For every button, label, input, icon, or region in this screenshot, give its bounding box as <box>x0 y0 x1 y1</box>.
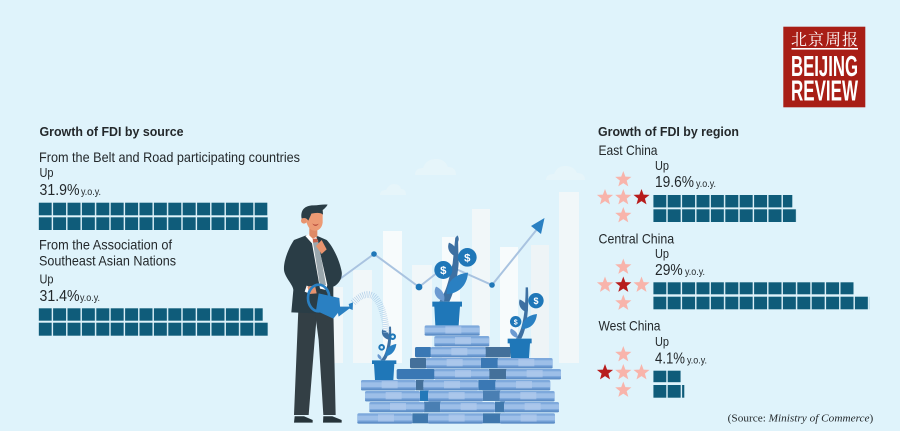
bar: 19.6 percent <box>653 195 797 222</box>
block: West China <box>597 318 707 398</box>
block: Belt and Road: From the Belt and Road participating countries <box>39 149 300 165</box>
block: West China: Up <box>655 335 669 349</box>
block: Belt and Road: 31.9% <box>40 182 80 199</box>
block: Central China: 29% <box>655 262 683 279</box>
block: West China: 4.1% <box>655 350 685 367</box>
block: Central China: Central China <box>598 230 674 246</box>
logo: Beijing Review <box>783 27 865 108</box>
block: ASEAN: From the Association of <box>39 236 172 252</box>
block: ASEAN: Southeast Asian Nations <box>39 252 176 268</box>
bar: 4.1 percent <box>653 371 684 398</box>
plant: large centre: $ <box>464 252 471 264</box>
icon: stars, east highlighted <box>597 171 650 222</box>
head <box>301 204 328 239</box>
source note: (Source: Ministry of Commerce) <box>728 413 874 425</box>
block: East China: 19.6% <box>655 174 694 191</box>
bar: 29 percent <box>653 282 869 309</box>
lower hand <box>307 285 317 294</box>
block: Central China: y.o.y. <box>685 267 705 278</box>
illustration: potted money plants <box>372 235 544 380</box>
block: Central China: Up <box>655 247 669 261</box>
block: Central China <box>597 230 869 310</box>
icon: stars, centre highlighted <box>597 258 650 310</box>
plant: small left <box>372 327 396 380</box>
icon: stars, west highlighted <box>597 346 650 397</box>
block: Belt and Road <box>39 149 300 230</box>
water spray <box>353 294 387 333</box>
block: East China: East China <box>598 142 658 158</box>
background bar chart <box>333 192 579 363</box>
bar: 31.9 percent <box>39 203 268 230</box>
panel: growth of FDI by source <box>39 124 300 336</box>
trousers <box>294 310 336 415</box>
shirt and tie <box>305 234 327 294</box>
plant: large centre <box>432 235 477 325</box>
hand on chin <box>316 240 327 254</box>
heading: by region: Growth of FDI by region <box>598 124 739 139</box>
plant: right: $ <box>514 319 518 326</box>
shoes <box>294 416 342 423</box>
block: East China <box>597 142 797 222</box>
block: ASEAN: Up <box>40 272 54 286</box>
illustration: coin stacks <box>357 325 561 424</box>
jacket <box>284 235 342 314</box>
block: East China: Up <box>655 159 669 173</box>
block: ASEAN: y.o.y. <box>80 293 100 304</box>
block: West China: West China <box>598 318 661 334</box>
illustration: businessman with watering can <box>284 204 387 423</box>
block: West China: y.o.y. <box>687 355 707 366</box>
trend line with arrow <box>333 218 544 290</box>
plant: right: $ <box>533 296 538 306</box>
block: ASEAN: 31.4% <box>40 288 80 305</box>
plant: large centre: $ <box>440 265 447 277</box>
bar: 31.4 percent <box>39 308 268 336</box>
panel: growth of FDI by region <box>597 124 869 398</box>
logo: Beijing Review: 北京周报 <box>791 30 858 49</box>
heading: by source: Growth of FDI by source <box>40 124 184 139</box>
plant: right <box>508 287 544 358</box>
block: Belt and Road: y.o.y. <box>81 187 101 198</box>
clouds <box>380 159 585 195</box>
block: ASEAN <box>39 236 268 336</box>
watering can <box>308 285 353 319</box>
block: East China: y.o.y. <box>696 179 716 190</box>
block: Belt and Road: Up <box>40 166 54 180</box>
